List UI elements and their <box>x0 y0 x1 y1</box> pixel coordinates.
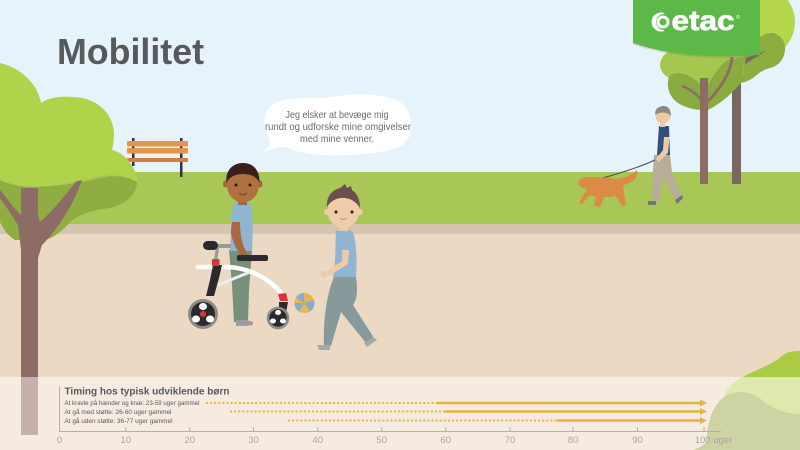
speech text <box>265 109 411 145</box>
solid arrows <box>437 400 707 424</box>
rear red joint <box>212 259 220 266</box>
legs <box>324 277 374 346</box>
axis labels: 30 <box>248 435 259 446</box>
axis labels: 90 <box>632 435 643 446</box>
legs <box>652 155 682 203</box>
legs <box>229 250 252 322</box>
ball <box>294 293 315 313</box>
path verge <box>0 224 800 234</box>
mouth <box>340 218 347 220</box>
logo wordmark: etac <box>672 5 734 36</box>
timeline chart <box>57 386 732 446</box>
front right tree <box>660 48 744 184</box>
speech text: med mine venner. <box>300 133 374 145</box>
bottom right hills <box>693 351 800 450</box>
neck <box>339 224 348 231</box>
axis labels: 0 <box>57 435 62 446</box>
hair <box>226 163 260 183</box>
eyes <box>234 184 252 186</box>
walker <box>190 241 288 328</box>
axis <box>60 386 721 432</box>
shoes <box>648 201 656 205</box>
head <box>227 168 259 202</box>
arm <box>656 137 670 162</box>
arm <box>327 250 349 276</box>
walking boy <box>317 184 377 350</box>
row labels: At kravle på hænder og knæ: 23-59 uger gammel <box>64 400 200 407</box>
rear fork <box>206 265 222 296</box>
icon: logo mark <box>652 13 668 31</box>
head <box>656 108 670 124</box>
axis labels: 100 uger <box>695 435 732 446</box>
axis labels: 60 <box>440 435 451 446</box>
neck <box>660 122 665 127</box>
dotted ranges <box>206 403 557 420</box>
mouth <box>239 193 247 195</box>
front wheel <box>268 308 288 328</box>
arm <box>231 222 251 263</box>
axis labels: 20 <box>184 435 195 446</box>
head <box>328 194 360 228</box>
front fork <box>279 302 288 318</box>
row labels: At gå med støtte: 26-60 uger gammel <box>64 409 172 416</box>
shirt <box>230 202 253 251</box>
shirt <box>657 126 670 155</box>
speech text: Jeg elsker at bevæge mig <box>286 109 389 121</box>
neck <box>238 198 247 205</box>
speech bubble <box>263 94 411 156</box>
lower frame <box>218 272 250 285</box>
front handle <box>237 255 268 261</box>
hand <box>320 270 328 278</box>
axis labels: 40 <box>312 435 323 446</box>
shoe <box>236 320 253 326</box>
logo banner <box>633 0 760 58</box>
row labels <box>64 400 200 425</box>
leash <box>595 160 655 180</box>
grass <box>0 172 800 224</box>
dog <box>578 170 637 207</box>
right ear <box>258 180 262 188</box>
white frame <box>198 267 282 294</box>
hair <box>655 106 671 116</box>
left tree <box>0 63 137 435</box>
rear wheel <box>190 300 216 328</box>
man walking <box>648 106 683 205</box>
shirt <box>333 229 357 277</box>
timeline panel background <box>0 377 800 450</box>
back right tree <box>721 0 795 184</box>
ears <box>223 180 228 188</box>
axis labels: 80 <box>568 435 578 446</box>
axis labels <box>57 435 732 446</box>
path <box>0 234 800 377</box>
row labels: At gå uden støtte: 36-77 uger gammel <box>64 418 172 425</box>
ears <box>324 209 363 215</box>
speech text: rundt og udforske mine omgivelser <box>265 121 411 133</box>
icon: bench <box>127 138 188 177</box>
axis labels: 70 <box>505 435 515 446</box>
rear handle <box>203 241 218 250</box>
boy with walker <box>223 163 262 326</box>
title: Mobilitet <box>57 31 204 72</box>
front red joint <box>278 293 288 301</box>
logo registered mark: ® <box>736 14 740 21</box>
axis labels: 50 <box>376 435 387 446</box>
axis labels: 10 <box>120 435 131 446</box>
eyes <box>334 210 354 214</box>
hair <box>327 184 360 208</box>
front shoe <box>364 337 377 347</box>
chart heading: Timing hos typisk udviklende børn <box>64 386 230 398</box>
walker gray post <box>214 244 231 262</box>
shoes <box>317 345 330 350</box>
back shoe <box>675 195 683 204</box>
